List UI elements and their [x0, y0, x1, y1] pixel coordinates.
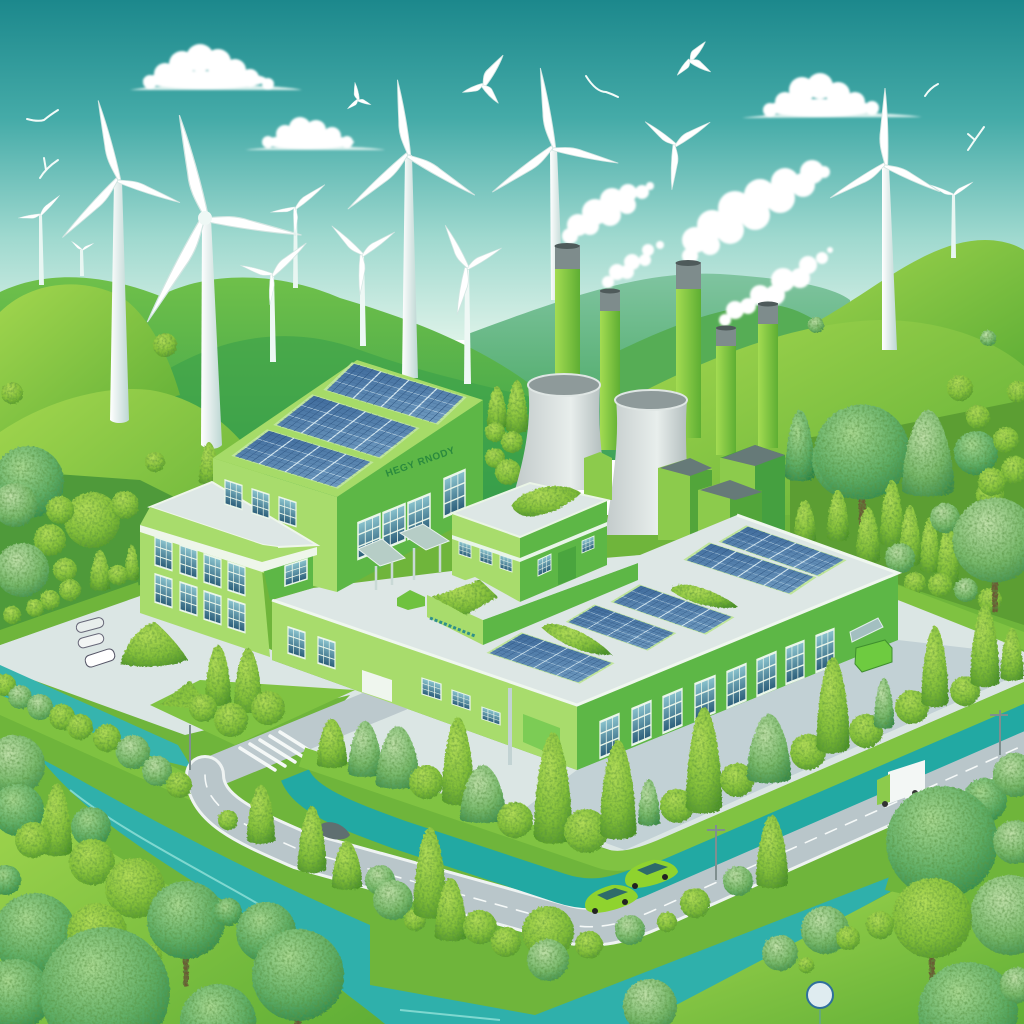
- left green hedge edge: [0, 582, 140, 645]
- turbine 4: [491, 68, 619, 300]
- bottom-right forest: [623, 753, 1024, 1024]
- front paving shade: [520, 640, 1024, 850]
- chimney 5: [758, 302, 778, 448]
- chimney 1: [554, 243, 580, 376]
- left block white band: [140, 525, 317, 572]
- right front hill: [630, 320, 1024, 530]
- roof grass patch left: [542, 624, 612, 655]
- hills: [0, 240, 1024, 600]
- access road: [205, 695, 1024, 927]
- rooftop equipment: [397, 590, 425, 610]
- smoke plumes: [562, 160, 833, 326]
- upper building right wall: [337, 400, 483, 592]
- main river: [40, 758, 895, 1024]
- turbine 1: [60, 100, 182, 423]
- lower left and lower right banks: [640, 890, 1024, 1024]
- green car 1: [585, 885, 638, 914]
- inner canal: [295, 708, 1024, 893]
- centre small building band: [452, 522, 607, 562]
- right green hedge edge: [898, 585, 1024, 650]
- parked cars: [75, 617, 116, 668]
- turbine 3: [346, 79, 478, 378]
- upper building left windows: [225, 480, 296, 526]
- left block roof: [150, 482, 317, 547]
- grass clump on plaza: [120, 622, 188, 667]
- road link to plaza: [205, 695, 400, 775]
- centre building windows: [459, 536, 594, 576]
- lower wing right windows: [600, 629, 834, 758]
- turbine 2: [144, 114, 303, 449]
- chimney 3: [676, 260, 701, 438]
- far middle hill: [465, 274, 850, 460]
- teal canal upper left: [0, 665, 192, 768]
- left block side wall: [262, 553, 313, 600]
- left front hill: [0, 389, 265, 600]
- lower wing roof edge: [272, 515, 898, 705]
- upper building roof: [213, 360, 483, 497]
- chimney 4: [716, 326, 736, 455]
- sign on upper building: HEGY RNODY: [384, 445, 457, 480]
- ground: [0, 515, 1024, 1024]
- left inner ridge: [130, 336, 545, 520]
- sky background: [0, 0, 1024, 340]
- curved main road: [205, 738, 1024, 927]
- chimney 2: [600, 288, 620, 450]
- loading bay: [362, 670, 392, 702]
- solar panels on lower roof: [488, 526, 845, 683]
- topiary trees and bushes: [0, 604, 1024, 1024]
- clouds: [130, 44, 922, 150]
- mid ridge hill: [600, 305, 860, 420]
- flying pinwheels: [346, 39, 713, 111]
- left bank shrubs: [0, 674, 238, 830]
- centre small building roof: [452, 483, 607, 537]
- planted strip trees: [317, 604, 1024, 853]
- cooling tower 2: [605, 390, 692, 535]
- left side forest: [0, 333, 219, 624]
- turbine 5: [829, 88, 942, 350]
- lower wing left wall: [272, 600, 577, 770]
- centre small building right wall: [520, 500, 607, 602]
- river highlights: [70, 790, 500, 1020]
- white delivery truck: [877, 760, 925, 807]
- roof garden on centre building: [512, 486, 581, 516]
- factory complex: [140, 360, 898, 770]
- left block front wall: [140, 527, 270, 657]
- low terrace right wall: [483, 563, 638, 645]
- green generator: [855, 640, 892, 672]
- power plant machinery blocks: [584, 445, 785, 540]
- lower wing right wall: [577, 573, 898, 770]
- dark forest floor right: [790, 400, 1024, 625]
- terrace planter: [432, 580, 498, 615]
- upper building left wall: [213, 458, 337, 592]
- plume 4: [719, 247, 833, 326]
- cooling towers: [515, 374, 692, 535]
- rooftop greenery: [432, 486, 738, 655]
- roof grass patch right: [670, 585, 738, 608]
- road-side trees: [247, 785, 788, 981]
- lower wing roof: [272, 515, 898, 705]
- right side forest: [794, 317, 1024, 612]
- plaza and service ground: [0, 595, 1024, 855]
- side canopy: [850, 618, 883, 642]
- solar panels on upper roof: [233, 363, 465, 488]
- low terrace roof: [427, 563, 638, 620]
- entrance canopies: [358, 524, 449, 590]
- left block parapet: [140, 507, 278, 565]
- plume 3: [682, 160, 830, 264]
- cloud: right: [742, 73, 922, 118]
- left back hill: [0, 277, 548, 520]
- vehicles: [320, 760, 925, 914]
- planted strip along plaza: [302, 686, 1024, 861]
- crosswalk: [240, 732, 315, 770]
- left block windows: [155, 537, 307, 632]
- centre building door: [558, 546, 576, 585]
- cooling tower 1: [515, 374, 608, 490]
- cloud: top left: [130, 44, 302, 90]
- side door: [523, 714, 560, 758]
- wind turbines: [18, 39, 974, 449]
- left bright slope: [0, 284, 180, 440]
- back trees near power plant: [485, 380, 815, 485]
- bottom-left forest: [0, 735, 344, 1024]
- terrace strip windows: [430, 618, 475, 636]
- bush strip left: [0, 695, 190, 800]
- entrance planting bed: [150, 680, 355, 745]
- green car 2: [625, 860, 678, 889]
- low terrace left wall: [427, 595, 483, 645]
- lower wing left windows: [288, 627, 500, 725]
- right back hill: [790, 240, 1024, 380]
- utility poles: [190, 710, 1008, 880]
- plume 2: [602, 241, 664, 288]
- small solar sign: [807, 982, 833, 1024]
- plume 1: [562, 182, 654, 244]
- drain pipe: [508, 688, 512, 765]
- cloud: centre: [245, 117, 385, 150]
- small distant turbines: [18, 119, 974, 384]
- shrubs by entrance: [160, 645, 285, 737]
- centre small building left wall: [452, 513, 520, 602]
- dark car: [320, 822, 350, 840]
- chimneys: [554, 243, 778, 455]
- dark forest floor left: [0, 470, 200, 632]
- upper building right windows: [358, 470, 465, 559]
- birds: [27, 76, 984, 178]
